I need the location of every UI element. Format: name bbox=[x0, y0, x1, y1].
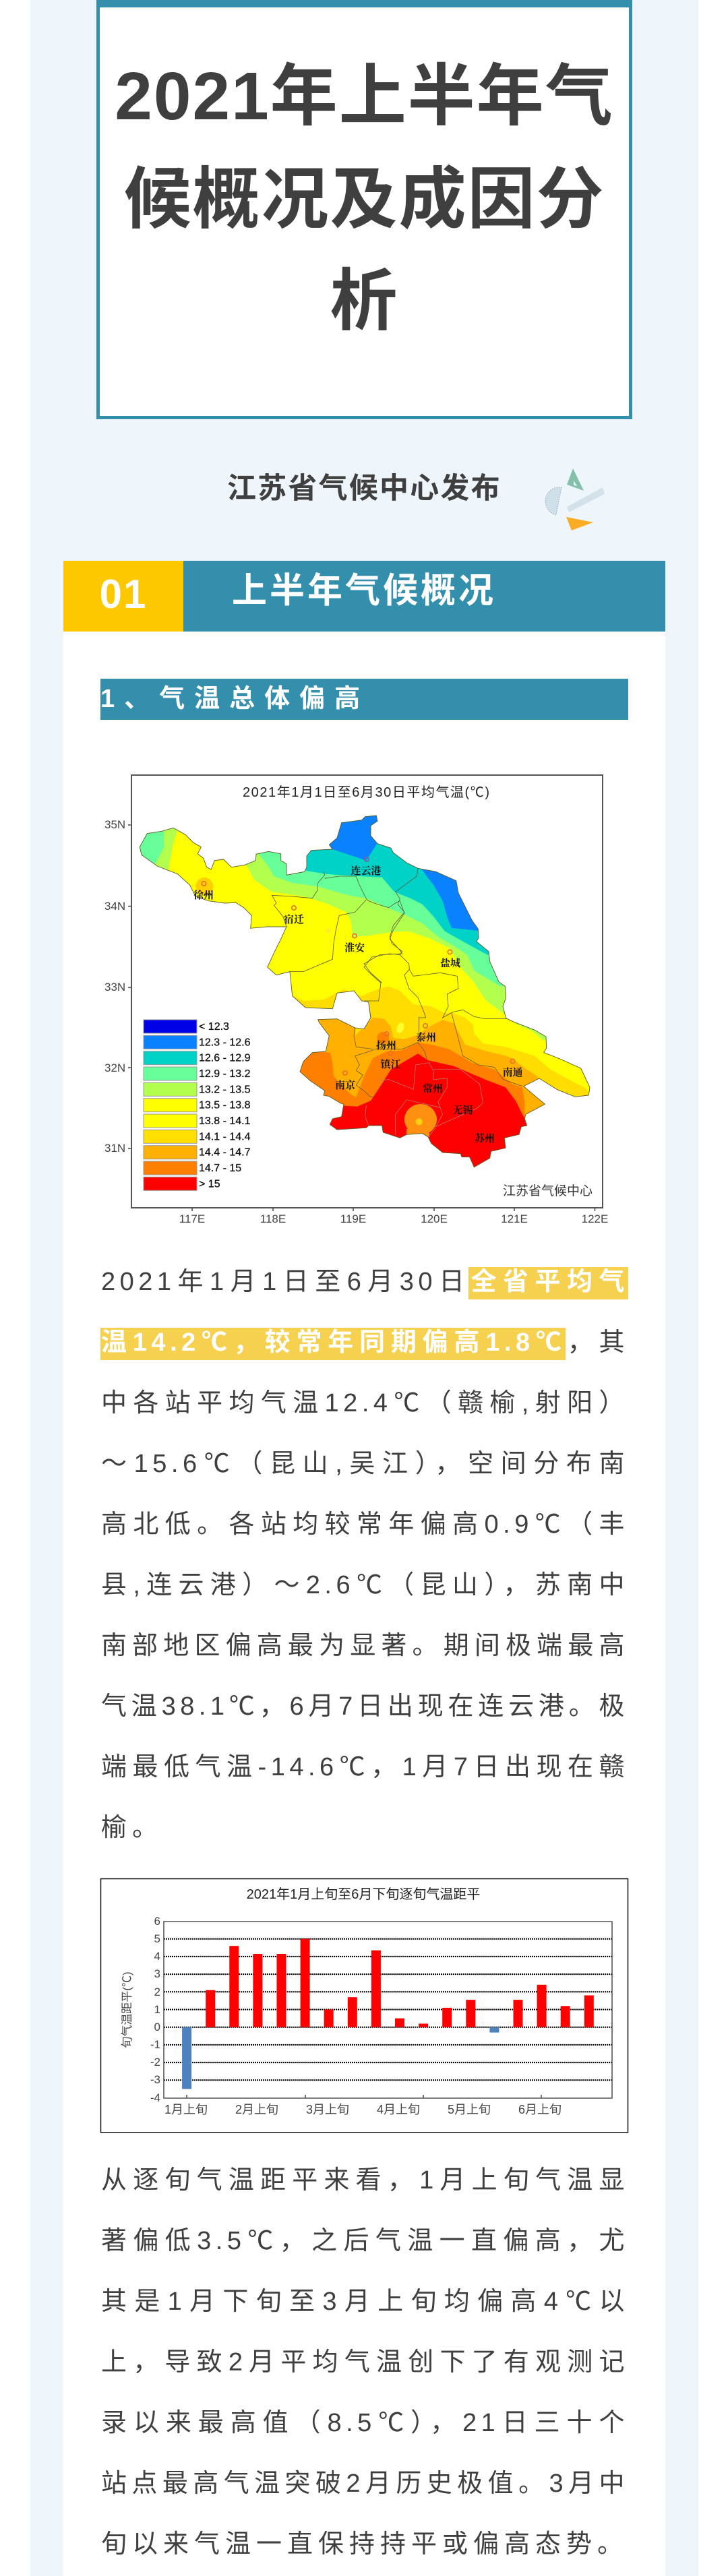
title box bbox=[96, 0, 632, 419]
y axis labels: 4 bbox=[154, 1950, 160, 1963]
paragraph: anomaly analysis: 录以来最高值（8.5℃），21日三十个 bbox=[101, 2409, 629, 2437]
section number bbox=[63, 561, 183, 632]
paragraph: temperature summary: ～15.6℃（昆山,吴江），空间分布南 bbox=[101, 1450, 629, 1478]
y axis labels: -2 bbox=[150, 2056, 160, 2068]
map legend: 14.7 - 15 bbox=[199, 1163, 241, 1174]
map legend: 13.8 - 14.1 bbox=[199, 1115, 251, 1127]
section number: 01 bbox=[100, 572, 147, 617]
latitude axis: 31N bbox=[104, 1142, 125, 1155]
province outline bbox=[140, 816, 590, 1167]
paragraph: temperature summary: 南部地区偏高最为显著。期间极端最高 bbox=[101, 1632, 629, 1660]
y axis labels: 3 bbox=[154, 1967, 160, 1980]
x axis labels: 3月上旬 bbox=[306, 2103, 349, 2116]
city labels: 苏州 bbox=[475, 1132, 495, 1144]
white content panel bbox=[63, 632, 665, 2576]
city labels: 淮安 bbox=[344, 942, 365, 954]
paragraph: anomaly analysis: 上，导致2月平均气温创下了有观测记 bbox=[101, 2348, 629, 2376]
publisher line: 江苏省气候中心发布 bbox=[227, 472, 502, 505]
y axis labels: -4 bbox=[150, 2091, 160, 2104]
plot border and ticks bbox=[164, 1922, 612, 2098]
paragraph: temperature summary: 温14.2℃，较常年同期偏高1.8℃，其 bbox=[101, 1328, 629, 1357]
chart title: 2021年1月上旬至6月下旬逐旬气温距平 bbox=[247, 1887, 480, 1902]
y axis labels: 0 bbox=[154, 2021, 160, 2033]
map frame bbox=[131, 775, 603, 1208]
longitude axis: 118E bbox=[260, 1213, 286, 1225]
map legend: > 15 bbox=[199, 1178, 220, 1190]
title box: 析 bbox=[330, 264, 399, 339]
map legend bbox=[144, 1020, 251, 1190]
city labels: 盐城 bbox=[440, 957, 460, 969]
latitude axis bbox=[104, 818, 131, 1155]
city labels: 徐州 bbox=[193, 890, 214, 901]
icon: ruler, protractor and set squares bbox=[545, 468, 605, 530]
y axis labels: -3 bbox=[150, 2073, 160, 2086]
x axis labels: 4月上旬 bbox=[377, 2103, 420, 2116]
subheading bar bbox=[100, 679, 628, 720]
longitude axis: 120E bbox=[421, 1213, 448, 1225]
paragraph: temperature summary: 气温38.1℃，6月7日出现在连云港。极 bbox=[101, 1692, 629, 1721]
map legend: 13.5 - 13.8 bbox=[199, 1100, 251, 1111]
longitude axis: 119E bbox=[340, 1213, 366, 1225]
highlight: line 1 bbox=[468, 1267, 628, 1299]
y axis labels: 5 bbox=[154, 1932, 160, 1945]
city labels: 宿迁 bbox=[284, 913, 304, 925]
longitude axis bbox=[179, 1208, 608, 1225]
x axis labels: 5月上旬 bbox=[448, 2103, 491, 2116]
y axis labels: 2 bbox=[154, 1986, 160, 1998]
paragraph: anomaly analysis: 其是1月下旬至3月上旬均偏高4℃以 bbox=[101, 2288, 629, 2316]
title box: 候概况及成因分 bbox=[124, 162, 605, 237]
y axis labels: 6 bbox=[154, 1915, 160, 1928]
bar chart: ten-day temperature anomaly bbox=[100, 1878, 628, 2133]
highlight: line 2 bbox=[100, 1328, 566, 1360]
city labels: 无锡 bbox=[452, 1104, 473, 1116]
y axis title: 旬气温距平(℃) bbox=[121, 1971, 133, 2048]
longitude axis: 117E bbox=[179, 1213, 205, 1225]
x axis labels: 2月上旬 bbox=[235, 2103, 278, 2116]
paragraph: temperature summary: 2021年1月1日至6月30日全省平均气 bbox=[101, 1268, 629, 1296]
city labels: 镇江 bbox=[380, 1058, 401, 1070]
chart frame bbox=[101, 1879, 628, 2133]
map legend: 12.9 - 13.2 bbox=[199, 1068, 251, 1080]
x axis labels: 1月上旬 bbox=[164, 2103, 208, 2116]
paragraph: temperature summary: 高北低。各站均较常年偏高0.9℃（丰 bbox=[101, 1510, 629, 1539]
x axis labels: 6月上旬 bbox=[518, 2103, 562, 2116]
city labels: 南京 bbox=[335, 1079, 356, 1091]
latitude axis: 34N bbox=[104, 900, 125, 913]
prefecture boundaries bbox=[272, 871, 404, 983]
latitude axis: 35N bbox=[104, 818, 125, 831]
paragraph: anomaly analysis: 从逐旬气温距平来看，1月上旬气温显 bbox=[101, 2166, 629, 2195]
map title: 2021年1月1日至6月30日平均气温(℃) bbox=[243, 785, 489, 800]
station markers bbox=[202, 857, 515, 1075]
map legend: < 12.3 bbox=[199, 1021, 229, 1033]
x axis labels bbox=[164, 2103, 562, 2116]
title box: 2021年上半年气 bbox=[115, 59, 614, 134]
section heading: 上半年气候概况 bbox=[232, 572, 496, 611]
latitude axis: 33N bbox=[104, 981, 125, 993]
map legend: 14.1 - 14.4 bbox=[199, 1131, 251, 1142]
map legend: 13.2 - 13.5 bbox=[199, 1084, 251, 1095]
paragraph: anomaly analysis: 站点最高气温突破2月历史极值。3月中 bbox=[101, 2470, 629, 2498]
bars bbox=[182, 1939, 594, 2089]
city labels bbox=[193, 865, 523, 1144]
map legend: 14.4 - 14.7 bbox=[199, 1147, 251, 1159]
city labels: 常州 bbox=[423, 1082, 443, 1095]
longitude axis: 121E bbox=[501, 1213, 528, 1225]
grid lines bbox=[164, 1939, 612, 2080]
city labels: 扬州 bbox=[376, 1039, 396, 1051]
paragraph: temperature summary: 县,连云港）～2.6℃（昆山），苏南中 bbox=[101, 1571, 629, 1599]
y axis labels: 1 bbox=[154, 2003, 160, 2016]
map: Jiangsu mean temperature bbox=[104, 774, 608, 1225]
paragraph: anomaly analysis: 旬以来气温一直保持持平或偏高态势。 bbox=[101, 2530, 628, 2558]
subheading bar: 1、气温总体偏高 bbox=[100, 685, 369, 713]
temperature field bbox=[140, 816, 589, 1167]
city labels: 南通 bbox=[503, 1066, 523, 1078]
paragraph: temperature summary: 榆。 bbox=[101, 1814, 163, 1842]
section header: 01 bbox=[63, 561, 665, 632]
city labels: 泰州 bbox=[416, 1031, 436, 1043]
paragraph: temperature summary: 端最低气温-14.6℃，1月7日出现在赣 bbox=[101, 1753, 629, 1781]
map credit: 江苏省气候中心 bbox=[503, 1184, 593, 1198]
paragraph: temperature summary: 中各站平均气温12.4℃（赣榆,射阳） bbox=[101, 1389, 629, 1417]
paragraph: anomaly analysis: 著偏低3.5℃，之后气温一直偏高，尤 bbox=[101, 2227, 629, 2255]
paragraph: temperature summary bbox=[101, 1268, 629, 1842]
y axis labels: -1 bbox=[150, 2038, 160, 2051]
y axis labels bbox=[150, 1915, 160, 2104]
map legend: 12.6 - 12.9 bbox=[199, 1053, 251, 1064]
latitude axis: 32N bbox=[104, 1062, 125, 1074]
city labels: 连云港 bbox=[351, 865, 382, 877]
longitude axis: 122E bbox=[582, 1213, 608, 1225]
map legend: 12.3 - 12.6 bbox=[199, 1037, 251, 1048]
paragraph: anomaly analysis bbox=[101, 2166, 629, 2558]
